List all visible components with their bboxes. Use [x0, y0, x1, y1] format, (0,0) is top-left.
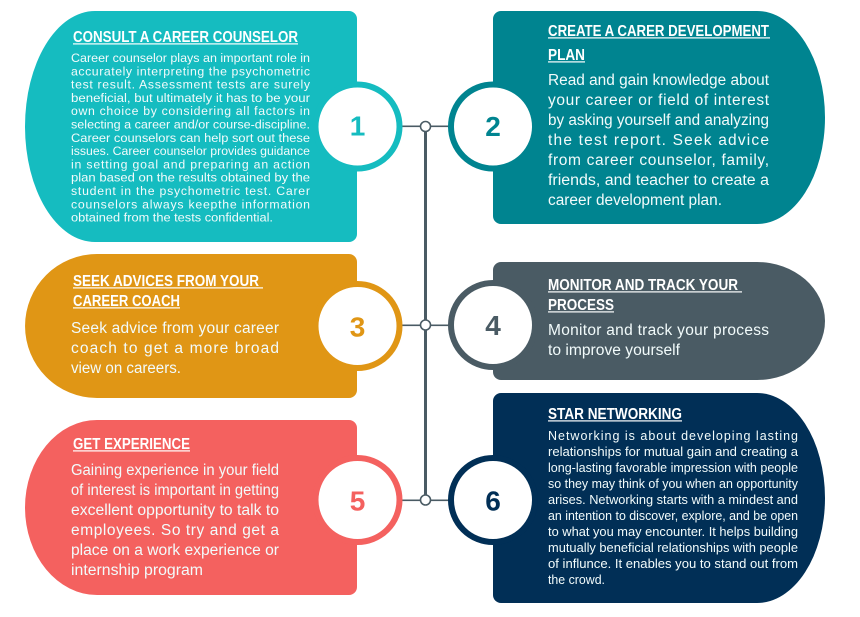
body text 3 — [71, 320, 279, 377]
badge 2: 2 — [485, 111, 501, 142]
body text 3: view on careers. — [71, 360, 181, 377]
body text 1 — [71, 51, 311, 225]
body text 1: counselors always keepthe information — [71, 197, 310, 211]
body text 6: arises. Networking starts with a mindest and — [548, 493, 798, 507]
body text 1: obtained from the tests confidential. — [71, 211, 273, 225]
body text 5: place on a work experience or — [71, 542, 279, 559]
body text 1: accurately interpreting the psychometric — [71, 64, 310, 78]
heading 5: GET EXPERIENCE — [73, 436, 190, 453]
badge 2 — [451, 84, 535, 168]
body text 2: by asking yourself and analyzing — [548, 112, 769, 129]
body text 6 — [548, 429, 799, 587]
badge 6: 6 — [485, 486, 501, 516]
body text 1: own choice by considering all factors in — [71, 104, 310, 118]
body text 3: Seek advice from your career — [71, 320, 279, 337]
badge 4 — [451, 283, 535, 367]
heading 6: STAR NETWORKING — [548, 406, 682, 423]
body text 1: Career counselor plays an important role in — [71, 51, 310, 65]
body text 6: to what you may encounter. It helps building — [548, 525, 798, 539]
body text 1: Career counselors can help sort out these — [71, 131, 310, 145]
heading 2: PLAN — [548, 47, 585, 64]
badge 5 — [316, 458, 400, 542]
body text 2: from career counselor, family, — [548, 152, 769, 169]
body text 5: Gaining experience in your field — [71, 462, 279, 479]
body text 4 — [548, 322, 769, 359]
body text 4: to improve yourself — [548, 342, 681, 359]
body text 1: issues. Career counselor provides guidance — [71, 144, 310, 158]
badge 1 — [316, 84, 400, 168]
body text 2: career development plan. — [548, 192, 722, 209]
body text 6: mutually beneficial relationships with people — [548, 541, 798, 555]
badge 4: 4 — [485, 310, 501, 341]
body text 6: so they may think of you when an opportunity — [548, 477, 799, 491]
panel 5: get experience — [25, 420, 400, 595]
body text 2: the test report. Seek advice — [548, 132, 769, 149]
badge 5: 5 — [350, 486, 365, 516]
heading 2: CREATE A CARER DEVELOPMENT — [548, 23, 769, 40]
body text 5: employees. So try and get a — [71, 522, 279, 539]
body text 1: selecting a career and/or course-discipline. — [71, 118, 310, 132]
heading 4: MONITOR AND TRACK YOUR — [548, 277, 738, 294]
heading 4 — [548, 277, 742, 314]
body text 2: your career or field of interest — [548, 92, 770, 109]
panel 3: seek advices from your career coach — [25, 254, 400, 398]
heading 3: CAREER COACH — [73, 293, 180, 310]
panel 4: monitor and track your process — [451, 262, 825, 380]
heading 3 — [73, 273, 263, 310]
body text 1: student in the psychometric test. Carer — [71, 184, 310, 198]
heading 4: PROCESS — [548, 297, 614, 314]
body text 6: the crowd. — [548, 573, 605, 587]
panel 1: consult a career counselor — [25, 11, 399, 242]
body text 2 — [548, 72, 770, 209]
body text 1: test result. Assessment tests are surely — [71, 78, 311, 92]
heading 2 — [548, 23, 770, 64]
badge 3 — [316, 284, 400, 368]
body text 1: in setting goal and preparing an action — [71, 157, 310, 171]
body text 2: Read and gain knowledge about — [548, 72, 770, 89]
badge 3: 3 — [350, 312, 365, 342]
body text 3: coach to get a more broad — [71, 340, 279, 357]
body text 4: Monitor and track your process — [548, 322, 769, 339]
body text 1: plan based on the results obtained by the — [71, 171, 310, 185]
badge 1: 1 — [350, 110, 365, 142]
panel 6: star networking — [451, 393, 825, 603]
body text 6: an intention to discover, explore, and be open — [548, 509, 798, 523]
body text 5: of interest is important in getting — [71, 482, 279, 499]
body text 1: beneficial, but ultimately it has to be your — [71, 91, 310, 105]
body text 5: excellent opportunity to talk to — [71, 502, 279, 519]
body text 6: Networking is about developing lasting — [548, 429, 798, 443]
body text 6: long-lasting favorable impression with people — [548, 461, 798, 475]
body text 5 — [71, 462, 279, 579]
panel 2: create a career development plan — [451, 11, 825, 224]
heading 3: SEEK ADVICES FROM YOUR — [73, 273, 259, 290]
body text 6: relationships for mutual gain and creating a — [548, 445, 798, 459]
heading 1: CONSULT A CAREER COUNSELOR — [73, 29, 298, 46]
connector: central timeline — [400, 122, 452, 505]
badge 6 — [451, 458, 535, 542]
body text 5: internship program — [71, 562, 203, 579]
body text 6: of influnce. It enables you to stand out from — [548, 557, 798, 571]
body text 2: friends, and teacher to create a — [548, 172, 769, 189]
